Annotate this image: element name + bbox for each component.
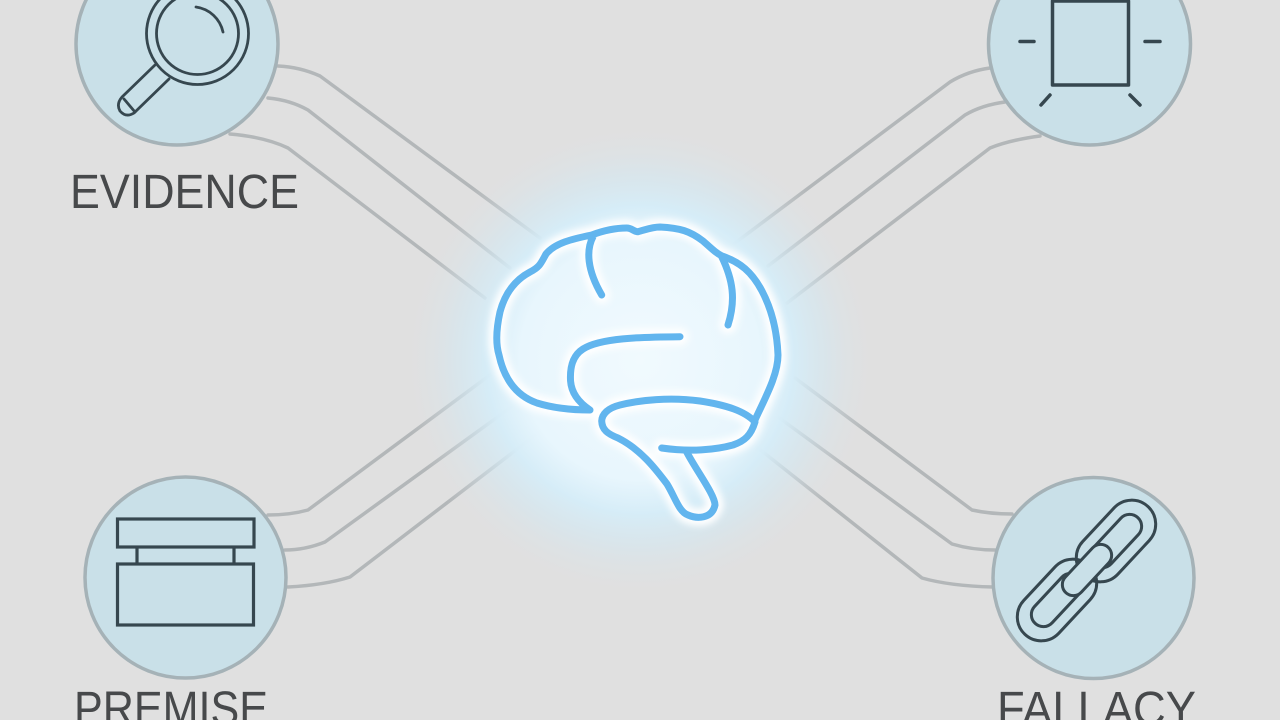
- icon: glowing brain: [497, 227, 778, 517]
- panel: fallacy: [993, 478, 1196, 720]
- connector lines: evidence: [230, 66, 540, 298]
- icon: chain links: [1007, 490, 1166, 651]
- label: evidence: EVIDENCE: [70, 166, 299, 219]
- brain halo: [497, 227, 778, 517]
- connector lines: premise: [268, 375, 550, 587]
- brain outline: [497, 227, 778, 517]
- evidence circle: [76, 0, 278, 145]
- central glow: [400, 120, 880, 600]
- icon: frame with tick marks: [1020, 1, 1160, 105]
- panel: premise: [74, 477, 286, 720]
- top right circle: [988, 0, 1190, 145]
- connector lines: top right concept: [735, 68, 1040, 303]
- premise circle: [85, 477, 286, 678]
- icon: magnifying glass: [118, 0, 249, 115]
- panel: evidence: [70, 0, 299, 219]
- connector lines: fallacy: [758, 378, 1012, 587]
- panel: top right concept: [988, 0, 1190, 145]
- fallacy circle: [993, 478, 1194, 678]
- icon: stacked blocks: [118, 519, 254, 625]
